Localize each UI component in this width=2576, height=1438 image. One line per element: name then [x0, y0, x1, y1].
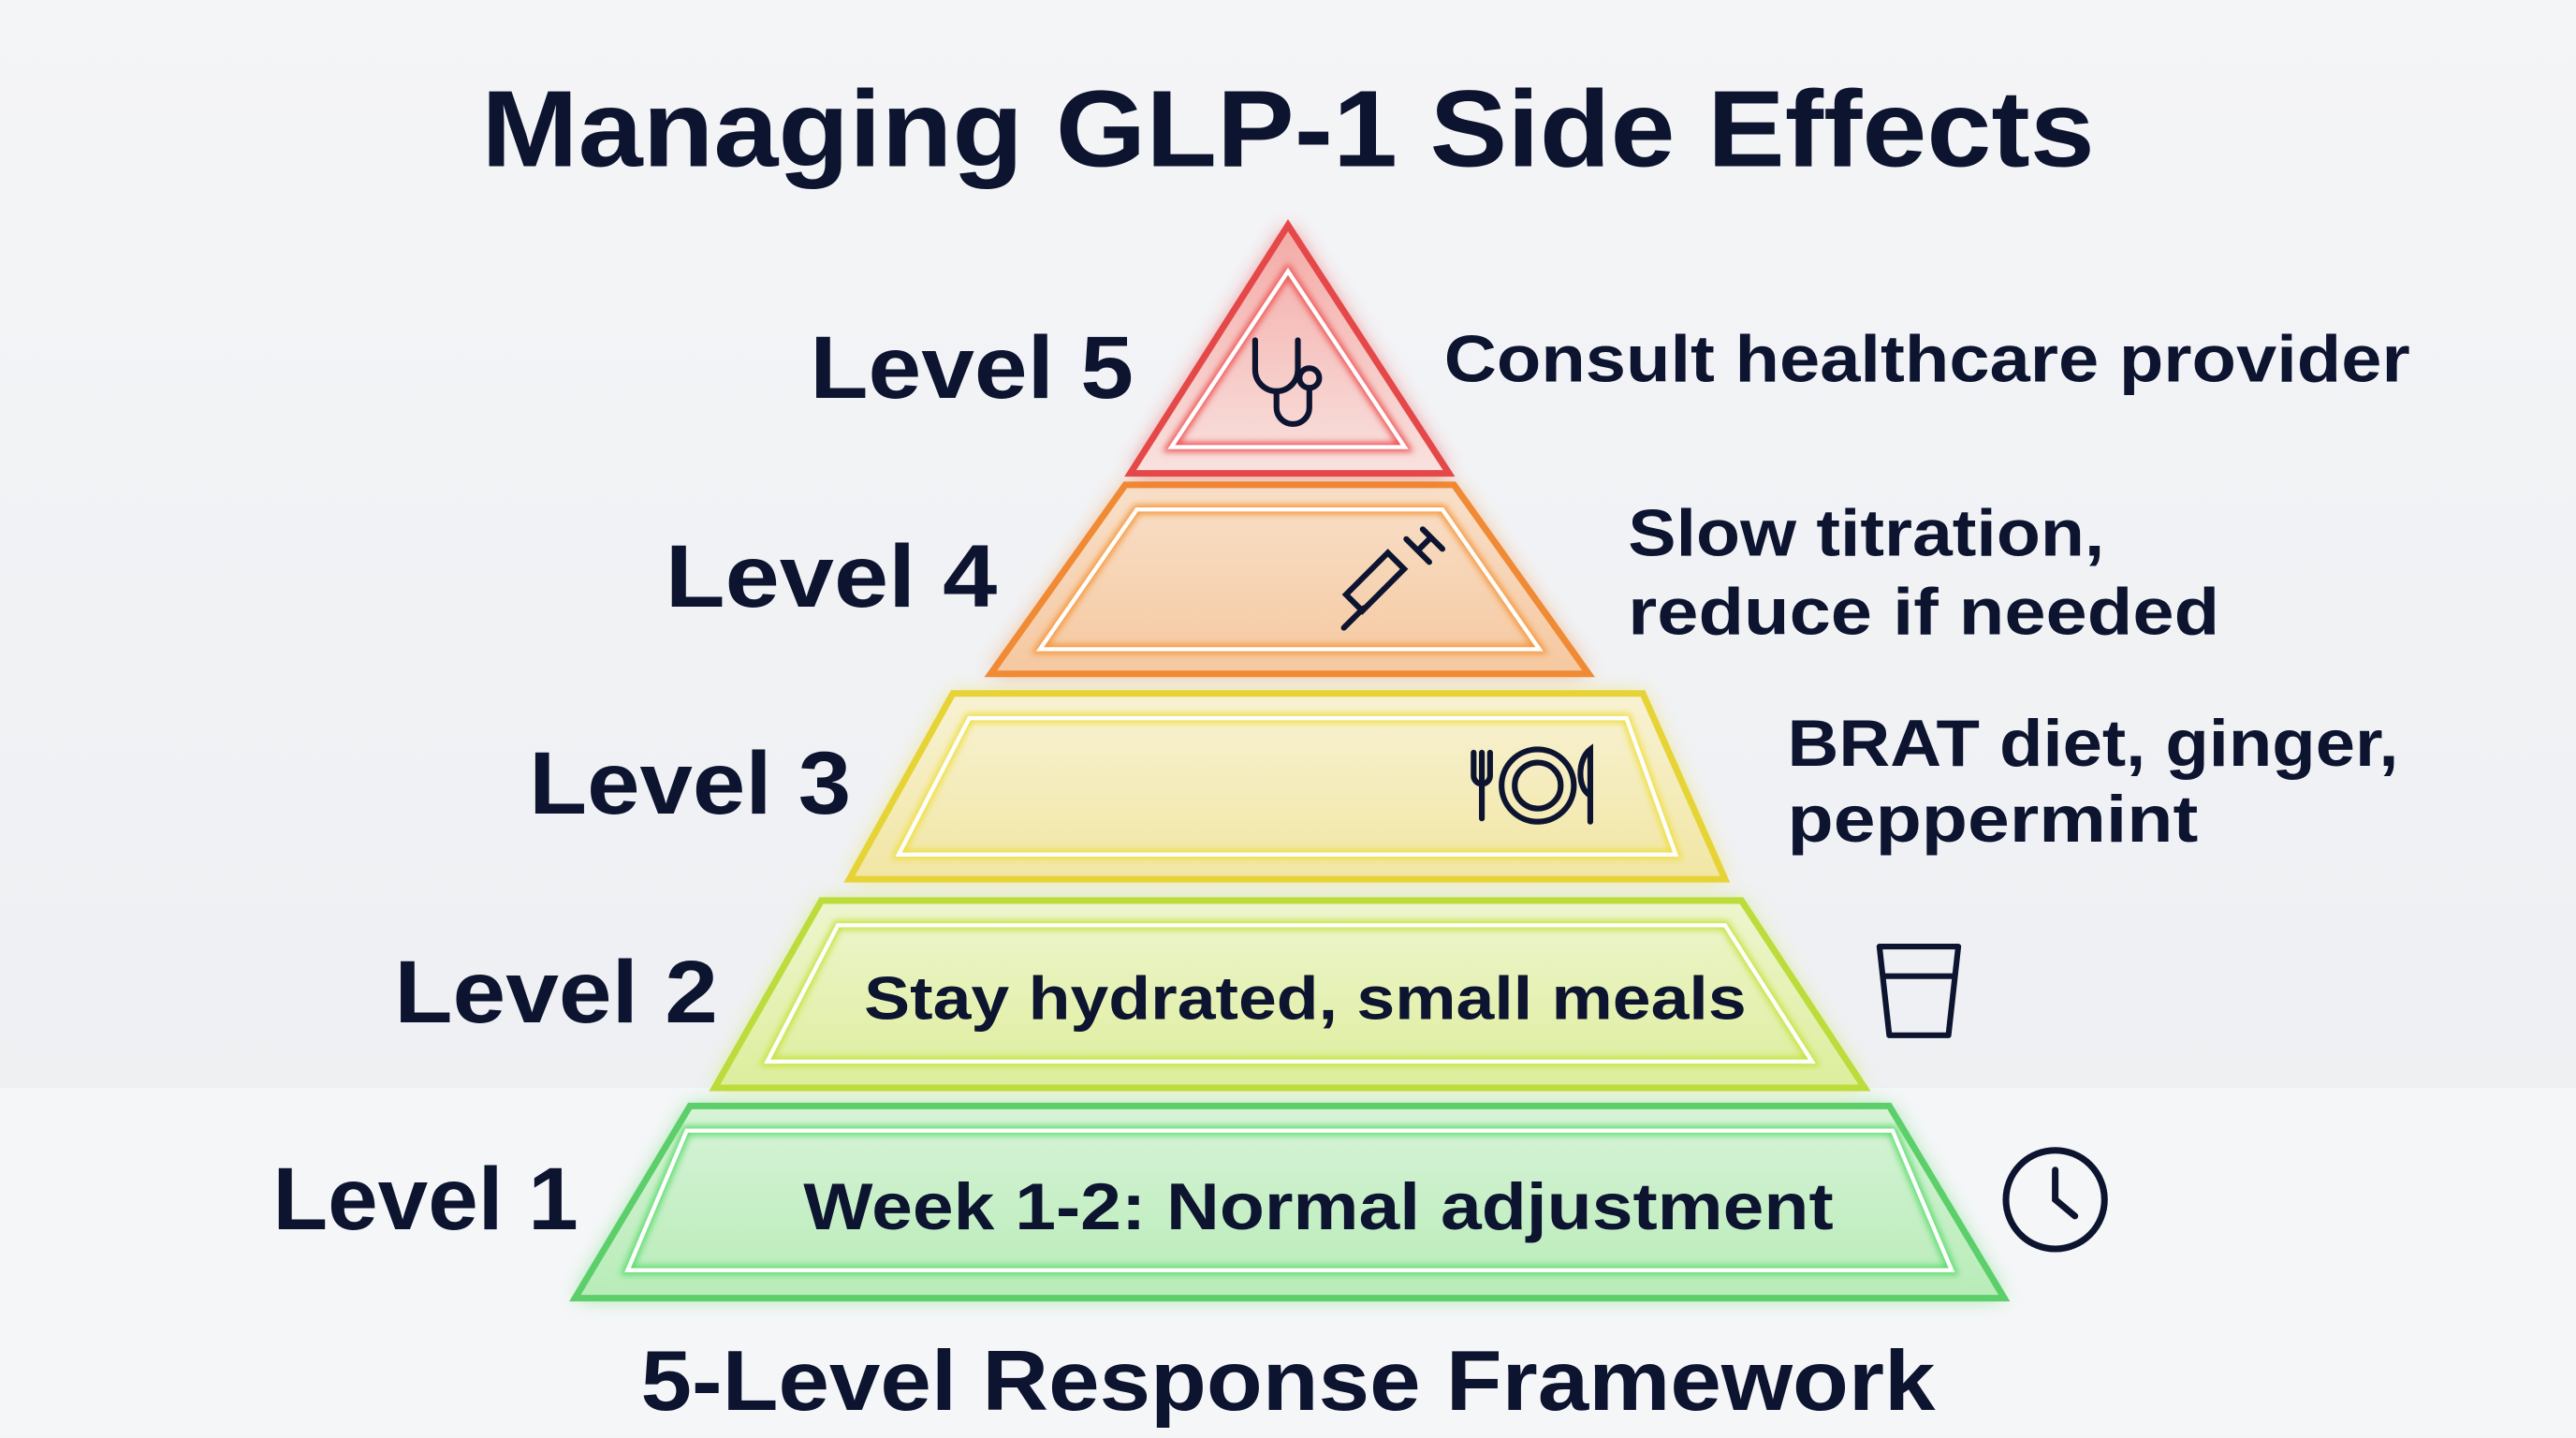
level labels: Level 3: [529, 734, 851, 833]
level labels: [272, 318, 1134, 1249]
descriptions: BRAT diet, ginger,: [1788, 706, 2398, 780]
level labels: Level 1: [272, 1150, 578, 1249]
descriptions: Consult healthcare provider: [1444, 321, 2410, 395]
layer 5: [1131, 226, 1449, 474]
level labels: Level 2: [394, 943, 718, 1042]
descriptions: peppermint: [1788, 782, 2198, 856]
descriptions: reduce if needed: [1628, 575, 2219, 649]
level labels: Level 5: [810, 318, 1134, 418]
level labels: Level 4: [666, 527, 998, 626]
layer 4: [990, 485, 1588, 674]
layer 2: [714, 901, 1865, 1088]
icon: syringe: [1344, 529, 1442, 628]
descriptions: Week 1-2: Normal adjustment: [803, 1169, 1834, 1243]
descriptions: Slow titration,: [1628, 495, 2104, 569]
pyramid: [575, 226, 2004, 1299]
icon: cup: [1880, 946, 1958, 1035]
icon: plate: [1473, 749, 1590, 822]
layer 3: [849, 694, 1725, 879]
descriptions: Stay hydrated, small meals: [864, 963, 1747, 1032]
icon: clock: [2006, 1151, 2104, 1249]
layer 1: [575, 1106, 2004, 1299]
title: Managing GLP-1 Side Effects: [481, 67, 2095, 189]
descriptions: [803, 321, 2410, 1243]
subtitle: 5-Level Response Framework: [640, 1333, 1936, 1429]
icon: stethoscope: [1255, 340, 1319, 424]
